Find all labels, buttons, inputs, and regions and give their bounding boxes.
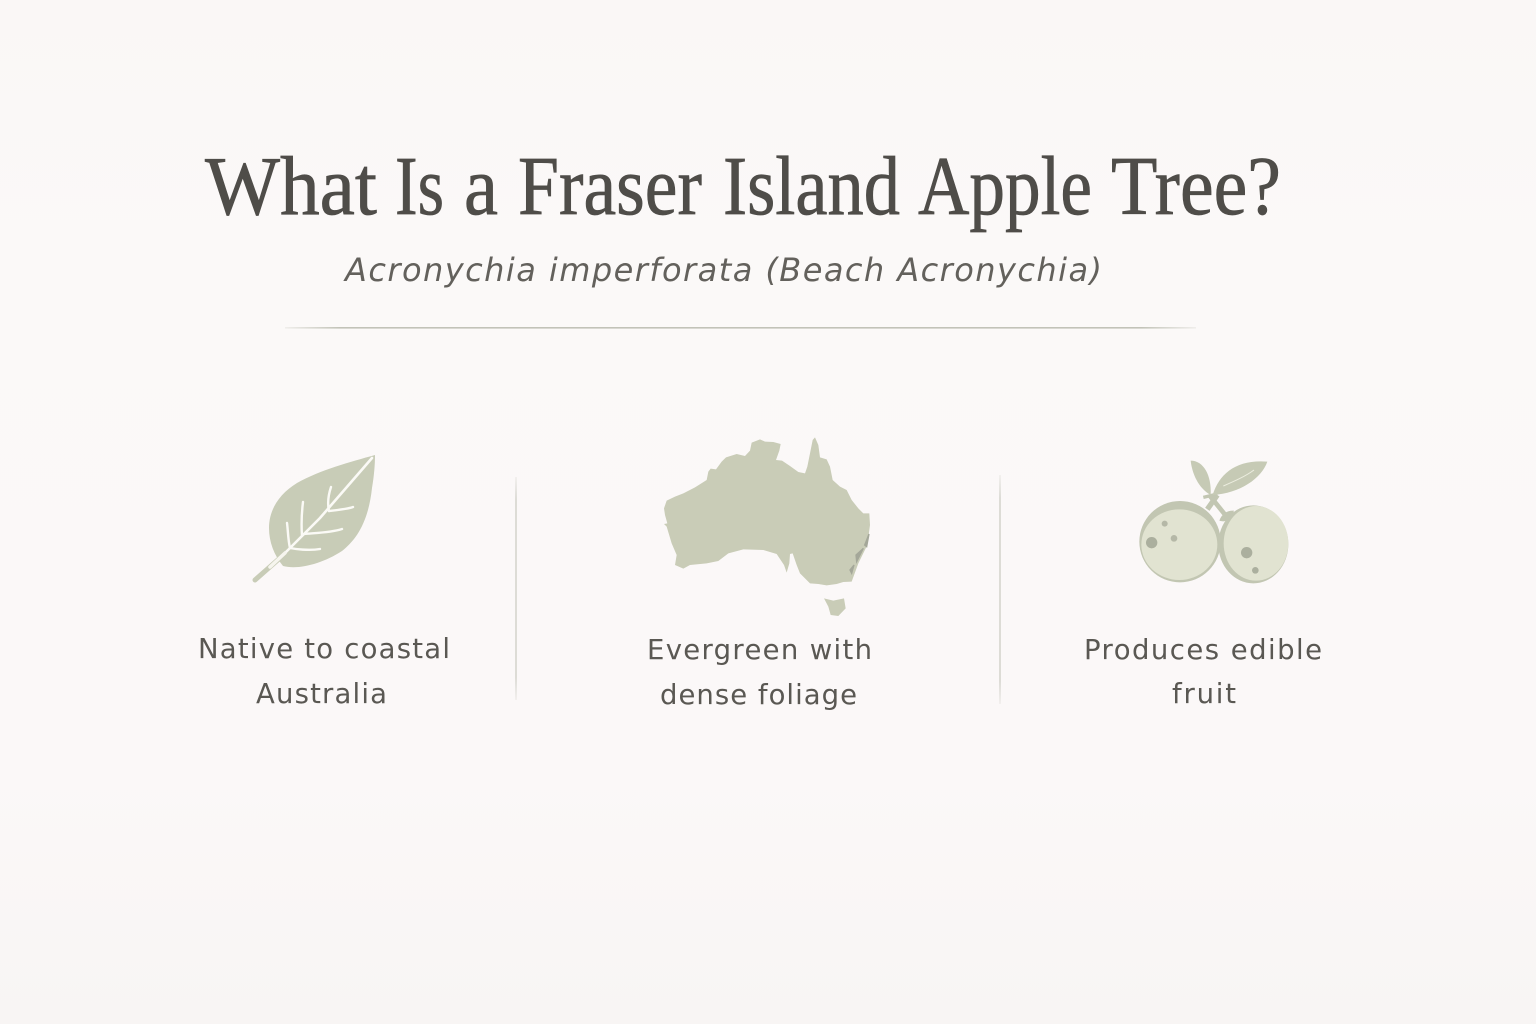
- text: evergreen with dense foliage: [647, 634, 872, 711]
- text: evergreen with dense foliage: Evergreen with: [647, 634, 872, 666]
- text: native to coastal Australia: [198, 633, 450, 710]
- title: [205, 139, 1281, 232]
- title: Is: [395, 139, 444, 232]
- title: What: [205, 139, 377, 232]
- text: native to coastal Australia: Native to coastal: [198, 633, 450, 665]
- icon: leaf: [255, 455, 375, 580]
- title: Island: [723, 139, 900, 232]
- title: Fraser: [518, 139, 702, 232]
- text: native to coastal Australia: Australia: [256, 678, 387, 710]
- title: a: [464, 139, 498, 232]
- title: Apple: [918, 139, 1092, 232]
- text: evergreen with dense foliage: dense foliage: [660, 679, 857, 711]
- text: produces edible fruit: fruit: [1172, 678, 1236, 710]
- text: produces edible fruit: [1084, 634, 1322, 710]
- title: Tree?: [1111, 139, 1281, 232]
- text: produces edible fruit: Produces edible: [1084, 634, 1322, 666]
- subtitle: Acronychia imperforata (Beach Acronychia): [343, 251, 1102, 289]
- icon: fruit: [1139, 461, 1288, 583]
- icon: Australia map: [664, 437, 870, 616]
